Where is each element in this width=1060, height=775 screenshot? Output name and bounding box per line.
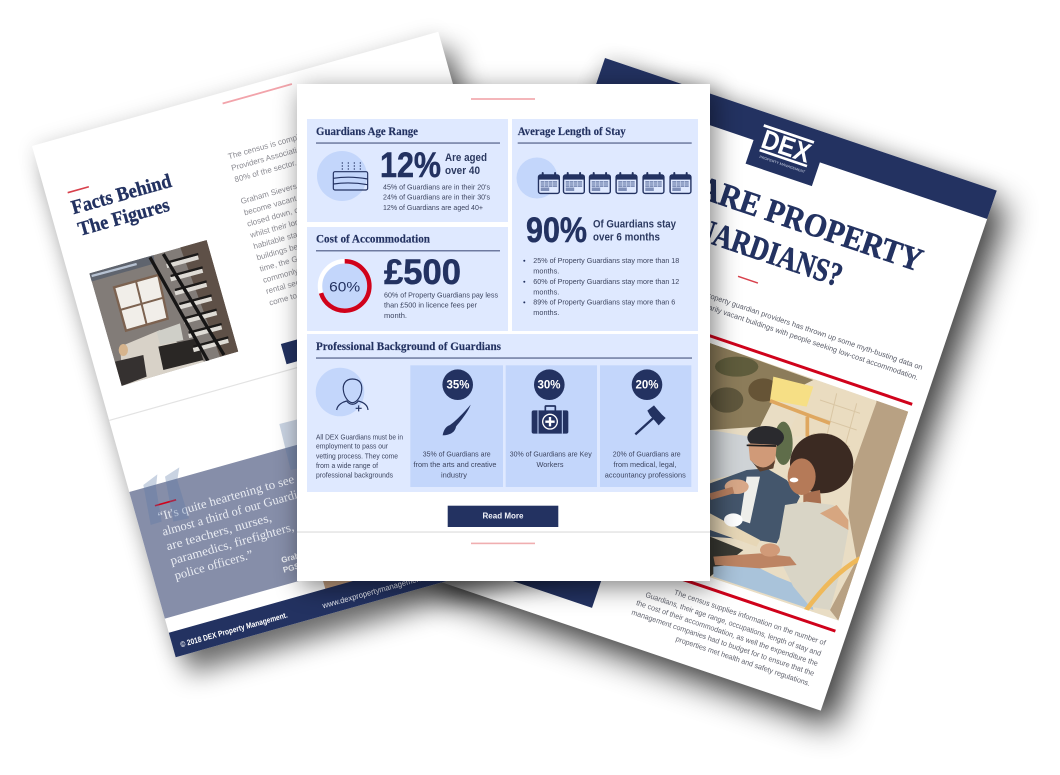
text: vetting note: from a wide range of bbox=[316, 461, 379, 470]
logo: DEX: PROPERTY MANAGEMENT bbox=[759, 155, 806, 174]
quote panel: police officers.” bbox=[173, 547, 255, 583]
heading: facts behind the figures bbox=[69, 170, 180, 241]
card: arts 35%: industry bbox=[441, 470, 467, 479]
quote marks bbox=[143, 419, 297, 525]
panel: professional background: Professional Background of Guardians bbox=[316, 339, 501, 353]
intro text: A census of property guardian providers has thrown up some myth-busting data on bbox=[665, 277, 924, 372]
card: arts 35% bbox=[410, 365, 503, 487]
heading: facts behind the figures: The Figures bbox=[76, 194, 172, 241]
panel: guardians age range: 12% bbox=[380, 146, 441, 185]
panel: cost of accommodation: month. bbox=[384, 311, 407, 320]
bullet list: 89% of Property Guardians stay more than 6 bbox=[533, 298, 675, 307]
panel: cost of accommodation bbox=[307, 227, 508, 331]
card: key workers 30%: 30% bbox=[538, 378, 561, 392]
icon: medical bag bbox=[532, 406, 568, 434]
button: read more: Read More bbox=[482, 511, 524, 521]
body copy: come to bbox=[268, 291, 299, 307]
title: GUARDIANS? bbox=[671, 204, 847, 294]
donut chart: 60% bbox=[320, 261, 369, 311]
text: vetting note: vetting process. They come bbox=[316, 451, 398, 460]
card: key workers 30%: 30% of Guardians are Key bbox=[510, 450, 592, 459]
panel: guardians age range bbox=[307, 119, 508, 222]
panel: cost of accommodation: £500 bbox=[384, 253, 461, 292]
panel: average length of stay bbox=[512, 119, 698, 331]
page: left, facts behind the figures bbox=[32, 32, 582, 657]
quote panel: PGSA bbox=[282, 560, 306, 575]
bullet list: months. bbox=[533, 308, 559, 317]
panel: average length of stay: over 6 months bbox=[593, 232, 660, 244]
footer bar: © 2018 DEX Property Management. bbox=[179, 611, 289, 649]
photo: couple laughing in a cafe bbox=[710, 343, 908, 621]
navy button bbox=[281, 317, 383, 364]
panel: guardians age range: Are aged bbox=[445, 152, 487, 164]
icon: paint brush bbox=[443, 405, 471, 435]
closing paragraph: The census supplies information on the number of bbox=[673, 588, 828, 648]
body copy: closed down, or bbox=[246, 205, 303, 229]
card: key workers 30% bbox=[506, 365, 597, 487]
text: vetting note bbox=[316, 432, 403, 479]
icon: gavel bbox=[635, 405, 666, 434]
body copy: become vacant bbox=[243, 194, 298, 217]
bullet list: months. bbox=[533, 266, 559, 275]
body copy: Graham Sievers bbox=[240, 182, 298, 206]
photo: loft interior with staircase bbox=[89, 240, 238, 386]
card: key workers 30%: Workers bbox=[536, 460, 564, 469]
closing paragraph: properties met health and safety regulations. bbox=[675, 634, 811, 688]
panel: average length of stay: Average Length of Stay bbox=[518, 124, 626, 138]
body copy: 80% of the sector. bbox=[234, 158, 298, 184]
panel: average length of stay: Of Guardians stay bbox=[593, 219, 677, 231]
button: read more bbox=[448, 506, 558, 527]
text: vetting note: employment to pass our bbox=[316, 442, 388, 451]
bullet list: months. bbox=[533, 287, 559, 296]
card: arts 35%: from the arts and creative bbox=[414, 460, 496, 469]
quote panel: almost a third of our Guardians bbox=[160, 483, 315, 539]
panel: professional background bbox=[307, 334, 698, 492]
card: medical legal 20%: 20% bbox=[636, 378, 659, 392]
body copy: The census is compiled by the bbox=[227, 123, 334, 161]
card: medical legal 20% bbox=[600, 365, 691, 487]
card: medical legal 20%: accountancy professions bbox=[605, 470, 686, 479]
quote panel bbox=[129, 378, 571, 619]
text: vetting note: professional backgrounds bbox=[316, 470, 393, 479]
bullet list: 25% of Property Guardians stay more than 18 bbox=[533, 256, 679, 265]
footer bar: www.dexpropertymanagement.co.uk bbox=[320, 568, 444, 611]
bottom navy button bbox=[494, 522, 610, 608]
page: right, who are property guardians bbox=[429, 58, 997, 711]
icon: birthday cake bbox=[333, 162, 368, 190]
body copy bbox=[226, 123, 375, 308]
quote panel: are teachers, nurses, bbox=[165, 510, 273, 553]
body copy: buildings become bbox=[255, 237, 318, 262]
panel: guardians age range: 45% of Guardians are in their 20's bbox=[383, 182, 490, 192]
quote panel: paramedics, firefighters, bbox=[169, 520, 296, 568]
icons: six calendars bbox=[538, 172, 691, 193]
page: centre, census statistics bbox=[297, 84, 710, 581]
quote panel: “It's quite heartening to see bbox=[156, 472, 296, 524]
card: medical legal 20%: 20% of Guardians are bbox=[613, 450, 681, 459]
quote panel: Graham Sievers bbox=[280, 539, 342, 565]
body copy: commonly bbox=[262, 266, 299, 285]
body copy: rental sector bbox=[265, 275, 310, 296]
donut chart: 60%: 60% bbox=[329, 279, 360, 295]
panel: guardians age range: 24% of Guardians are in their 30's bbox=[383, 193, 490, 202]
intro text: those filling temporarily vacant buildings with people seeking low-cost accommodation. bbox=[648, 283, 919, 382]
footer bar bbox=[169, 519, 582, 657]
icon: person with plus bbox=[337, 379, 368, 411]
logo: DEX: DEX bbox=[758, 124, 815, 169]
panel: guardians age range: over 40 bbox=[445, 165, 480, 177]
closing paragraph: management companies had to budget for to ensure that the bbox=[630, 608, 816, 678]
body copy: Providers Association bbox=[230, 143, 306, 173]
body copy: time, the Guardian bbox=[259, 247, 324, 274]
panel: guardians age range: 12% of Guardians are aged 40+ bbox=[383, 203, 484, 212]
card: medical legal 20%: from medical, legal, bbox=[614, 460, 676, 469]
card: arts 35%: 35% of Guardians are bbox=[423, 450, 491, 459]
heading: facts behind the figures: Facts Behind bbox=[69, 170, 174, 219]
title: WHO ARE PROPERTY bbox=[616, 144, 927, 279]
closing paragraph bbox=[627, 577, 828, 689]
body copy: whilst their long bbox=[248, 216, 305, 240]
panel: guardians age range: Guardians Age Range bbox=[316, 124, 419, 138]
bullet list bbox=[523, 256, 679, 317]
panel: average length of stay: 90% bbox=[526, 211, 587, 250]
panel: cost of accommodation: 60% of Property Guardians pay less bbox=[384, 290, 498, 300]
body copy: habitable state bbox=[252, 228, 305, 251]
text: vetting note: All DEX Guardians must be in bbox=[316, 432, 403, 441]
card: arts 35%: 35% bbox=[446, 378, 470, 392]
panel: cost of accommodation: Cost of Accommodation bbox=[316, 232, 430, 246]
panel: cost of accommodation: than £500 in licence fees per bbox=[384, 301, 477, 310]
closing paragraph: the cost of their accommodation, as well the expenditure the bbox=[635, 598, 819, 668]
header band with logo tab bbox=[587, 58, 997, 243]
bullet list: 60% of Property Guardians stay more than 12 bbox=[533, 277, 679, 286]
closing paragraph: Guardians, their age range, occupations, length of stay and bbox=[644, 590, 822, 658]
